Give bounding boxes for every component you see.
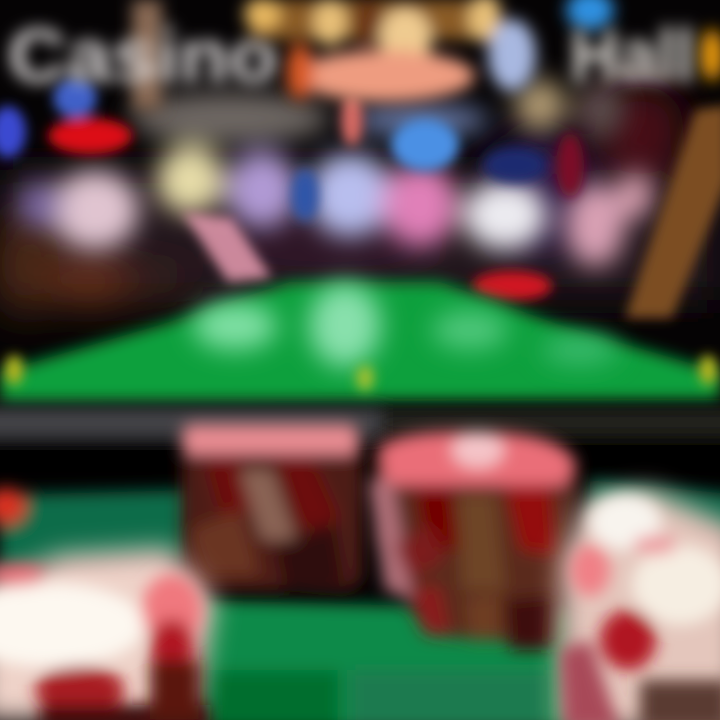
chip stack: left xyxy=(182,424,362,590)
title banner: blurred lettering and lights: Hall xyxy=(570,14,695,99)
title banner: blurred lettering and lights xyxy=(8,0,720,110)
poker chip: lower right xyxy=(560,490,720,720)
poker table: green felt xyxy=(0,282,720,402)
table rail xyxy=(0,408,720,482)
chip stack: center xyxy=(368,430,578,650)
background: audience and colored lights xyxy=(0,78,720,318)
lower felt xyxy=(0,480,720,720)
poker chip: lower left xyxy=(0,548,215,720)
title text: Casino xyxy=(8,14,278,99)
